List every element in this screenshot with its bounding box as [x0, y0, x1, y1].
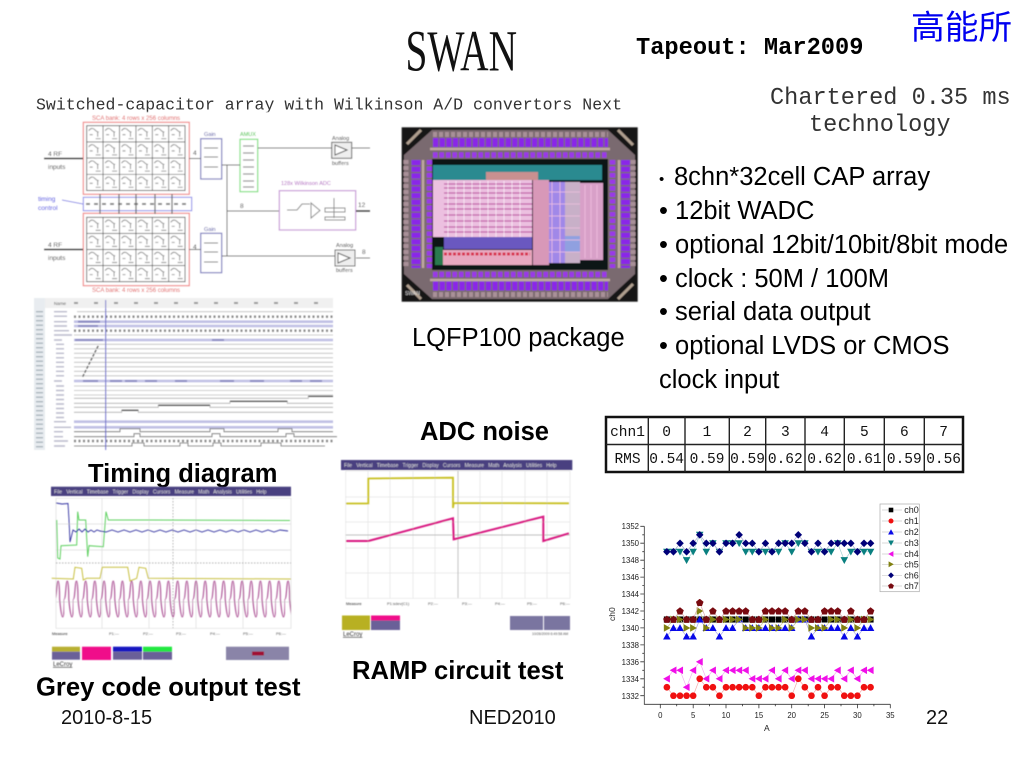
footer date: 2010-8-15 [61, 707, 152, 729]
oscilloscope: grey code output [51, 487, 291, 668]
feature list: • [659, 171, 664, 188]
chart legend: ch0 [904, 505, 919, 515]
timing diagram image [34, 298, 337, 450]
readout row: P4:--- [495, 601, 506, 606]
x axis labels: 0 [658, 711, 663, 720]
signal lines [189, 148, 370, 258]
y axis labels: 1340 [622, 624, 640, 633]
y axis labels: 1344 [622, 590, 640, 599]
table text: 0.56 [926, 452, 961, 468]
analog buffer bottom: 8 [362, 249, 366, 256]
axis titles: A [764, 723, 770, 733]
table text: RMS [614, 452, 641, 468]
table text: 0.54 [649, 452, 684, 468]
channel boxes [52, 647, 289, 660]
readout row [52, 631, 287, 636]
timing control: control [38, 205, 58, 212]
page number: 22 [926, 707, 948, 729]
feature list: • optional 12bit/10bit/8bit mode [659, 231, 1008, 259]
RF inputs: 4 RF [48, 151, 62, 158]
table text: 0.61 [847, 452, 882, 468]
x axis labels: 35 [886, 711, 895, 720]
chart legend: ch4 [904, 549, 919, 559]
table text: 6 [900, 425, 909, 441]
timestamp: 10/26/2009 6:49:58 AM [532, 632, 568, 636]
Wilkinson ADC [240, 181, 370, 230]
menu bar: File Vertical Timebase Trigger Display Cursors Measure Math Analysis Utilities Help [344, 463, 557, 469]
analog buffer top: Analog [332, 136, 349, 142]
gain blocks: 4 [193, 244, 197, 251]
y axis labels [622, 522, 640, 701]
feature list: • 12bit WADC [659, 197, 814, 225]
SCA bank top: SCA bank: 4 rows x 256 columns [92, 116, 180, 122]
technology note [770, 85, 1011, 139]
table text: chn1 [610, 425, 645, 441]
Wilkinson ADC: 128x Wilkinson ADC [281, 181, 331, 187]
x axis labels [658, 711, 895, 720]
table text: 0.62 [807, 452, 842, 468]
pad rings [406, 130, 633, 299]
timing waveforms [74, 300, 337, 450]
timing diagram caption: Timing diagram [88, 460, 277, 488]
readout row: P5:--- [243, 631, 254, 636]
LeCroy logo: LeCroy [343, 632, 362, 638]
pink ramp [346, 517, 569, 541]
axis titles [607, 607, 770, 733]
table text [610, 425, 961, 468]
table text: 0.59 [887, 452, 922, 468]
oscilloscope: ramp circuit [341, 460, 572, 638]
core [432, 159, 608, 270]
y axis labels: 1338 [622, 641, 639, 650]
RF inputs: 4 RF [48, 242, 62, 249]
readout row: P2:--- [143, 631, 154, 636]
y axis labels: 1346 [622, 573, 639, 582]
x axis labels: 5 [691, 711, 696, 720]
readout row: Measure [52, 631, 68, 636]
analog buffer bottom [335, 243, 366, 274]
gain blocks: Gain [204, 227, 216, 233]
tapeout label: Tapeout: Mar2009 [636, 35, 863, 62]
SCA bank bottom: SCA bank: 4 rows x 256 columns [92, 288, 180, 294]
SCA bank top [83, 116, 189, 194]
chart legend: ch7 [904, 581, 919, 591]
menu bar: File Vertical Timebase Trigger Display Cursors Measure Math Analysis Utilities Help [54, 490, 267, 496]
table text: 7 [939, 425, 948, 441]
feature list: • optional LVDS or CMOS [659, 332, 950, 360]
feature list: • clock : 50M / 100M [659, 265, 889, 293]
readout row: P1:--- [109, 631, 120, 636]
RF inputs: inputs [48, 164, 66, 171]
data series [667, 535, 871, 696]
institute name: 高能所 [911, 9, 1012, 47]
readout row: P3:--- [176, 631, 187, 636]
analog buffer top: buffers [332, 161, 349, 167]
table text: 3 [781, 425, 790, 441]
menu bar [51, 487, 291, 496]
block diagram: switched-capacitor array [36, 112, 370, 296]
blue trace [56, 503, 288, 542]
plot grid [346, 471, 570, 598]
menu bar [341, 460, 572, 470]
chart legend: ch6 [904, 570, 919, 580]
yellow trace [52, 567, 291, 581]
readout row: P5:--- [527, 601, 538, 606]
Wilkinson ADC: 12 [358, 202, 366, 209]
readout row: Measure [346, 601, 362, 606]
chart legend: ch1 [904, 516, 919, 526]
feature list: 8chn*32cell CAP array [674, 163, 930, 191]
subtitle: Switched-capacitor array with Wilkinson A/D convertors Next [36, 96, 622, 114]
package caption: LQFP100 package [412, 324, 625, 352]
chart legend: ch2 [904, 527, 919, 537]
readout row: P1:sdev(C1) [387, 601, 410, 606]
axes and ticks [640, 526, 890, 708]
timing control [38, 194, 192, 214]
chart legend [880, 504, 919, 592]
y axis labels: 1342 [622, 607, 639, 616]
channel boxes [342, 616, 570, 630]
analog buffer bottom: buffers [336, 268, 353, 274]
chart legend: ch3 [904, 538, 919, 548]
table text: 2 [743, 425, 752, 441]
chip corner labels: SWAN [405, 291, 420, 297]
feature list: clock input [659, 366, 779, 394]
readout row: P2:--- [428, 601, 439, 606]
RF inputs: inputs [48, 255, 66, 262]
chart legend: ch5 [904, 560, 919, 570]
x axis labels: 10 [722, 711, 731, 720]
y axis labels: 1352 [622, 522, 639, 531]
yellow square wave [346, 478, 569, 508]
y axis labels: 1332 [622, 692, 639, 701]
timing name column: Name [54, 301, 67, 306]
RF inputs [44, 151, 83, 262]
x axis labels: 25 [820, 711, 830, 720]
title: SWAN [406, 19, 517, 84]
y axis labels: 1334 [622, 675, 640, 684]
y axis labels: 1350 [622, 539, 640, 548]
SCA bank bottom [83, 213, 189, 294]
AMUX [240, 132, 258, 192]
timing name column [34, 298, 333, 450]
timing control: timing [38, 196, 56, 203]
x axis labels: 15 [755, 711, 764, 720]
x axis labels: 20 [787, 711, 797, 720]
table text: 0.62 [768, 452, 803, 468]
pink sine trace [56, 579, 291, 619]
feature list: • serial data output [659, 298, 871, 326]
gain blocks: 4 [193, 150, 197, 157]
readout row: P6:--- [560, 601, 571, 606]
table text: 4 [820, 425, 829, 441]
readout row: P3:--- [462, 601, 473, 606]
LeCroy logo: LeCroy [53, 662, 72, 668]
AMUX: AMUX [240, 132, 256, 138]
readout row: P6:--- [276, 631, 287, 636]
ADC noise table [606, 417, 963, 472]
table text: 0 [662, 425, 671, 441]
ramp caption: RAMP circuit test [352, 657, 564, 685]
readout row [346, 601, 571, 606]
footer event: NED2010 [469, 707, 556, 729]
analog buffer top [332, 136, 352, 167]
technology note: Chartered 0.35 ms [770, 85, 1011, 112]
chip layout image [402, 127, 638, 302]
axis titles: ch0 [607, 607, 617, 621]
gain blocks [193, 132, 222, 273]
y axis labels: 1336 [622, 658, 639, 667]
Wilkinson ADC: 8 [240, 203, 244, 210]
table text: 0.59 [690, 452, 724, 468]
grey code caption: Grey code output test [36, 674, 301, 702]
technology note: technology [809, 112, 951, 139]
analog buffer bottom: Analog [336, 243, 353, 249]
x axis labels: 30 [853, 711, 862, 720]
table text: 1 [703, 425, 711, 441]
green trace [57, 512, 290, 559]
y axis labels: 1348 [622, 556, 639, 565]
ADC noise heading: ADC noise [420, 418, 549, 446]
feature list [659, 163, 1008, 394]
scatter chart: ch0 to ch7 [607, 504, 919, 733]
gain blocks: Gain [204, 132, 216, 138]
table text: 0.59 [730, 452, 765, 468]
readout row: P4:--- [210, 631, 221, 636]
table text: 5 [860, 425, 869, 441]
plot grid [56, 498, 291, 628]
